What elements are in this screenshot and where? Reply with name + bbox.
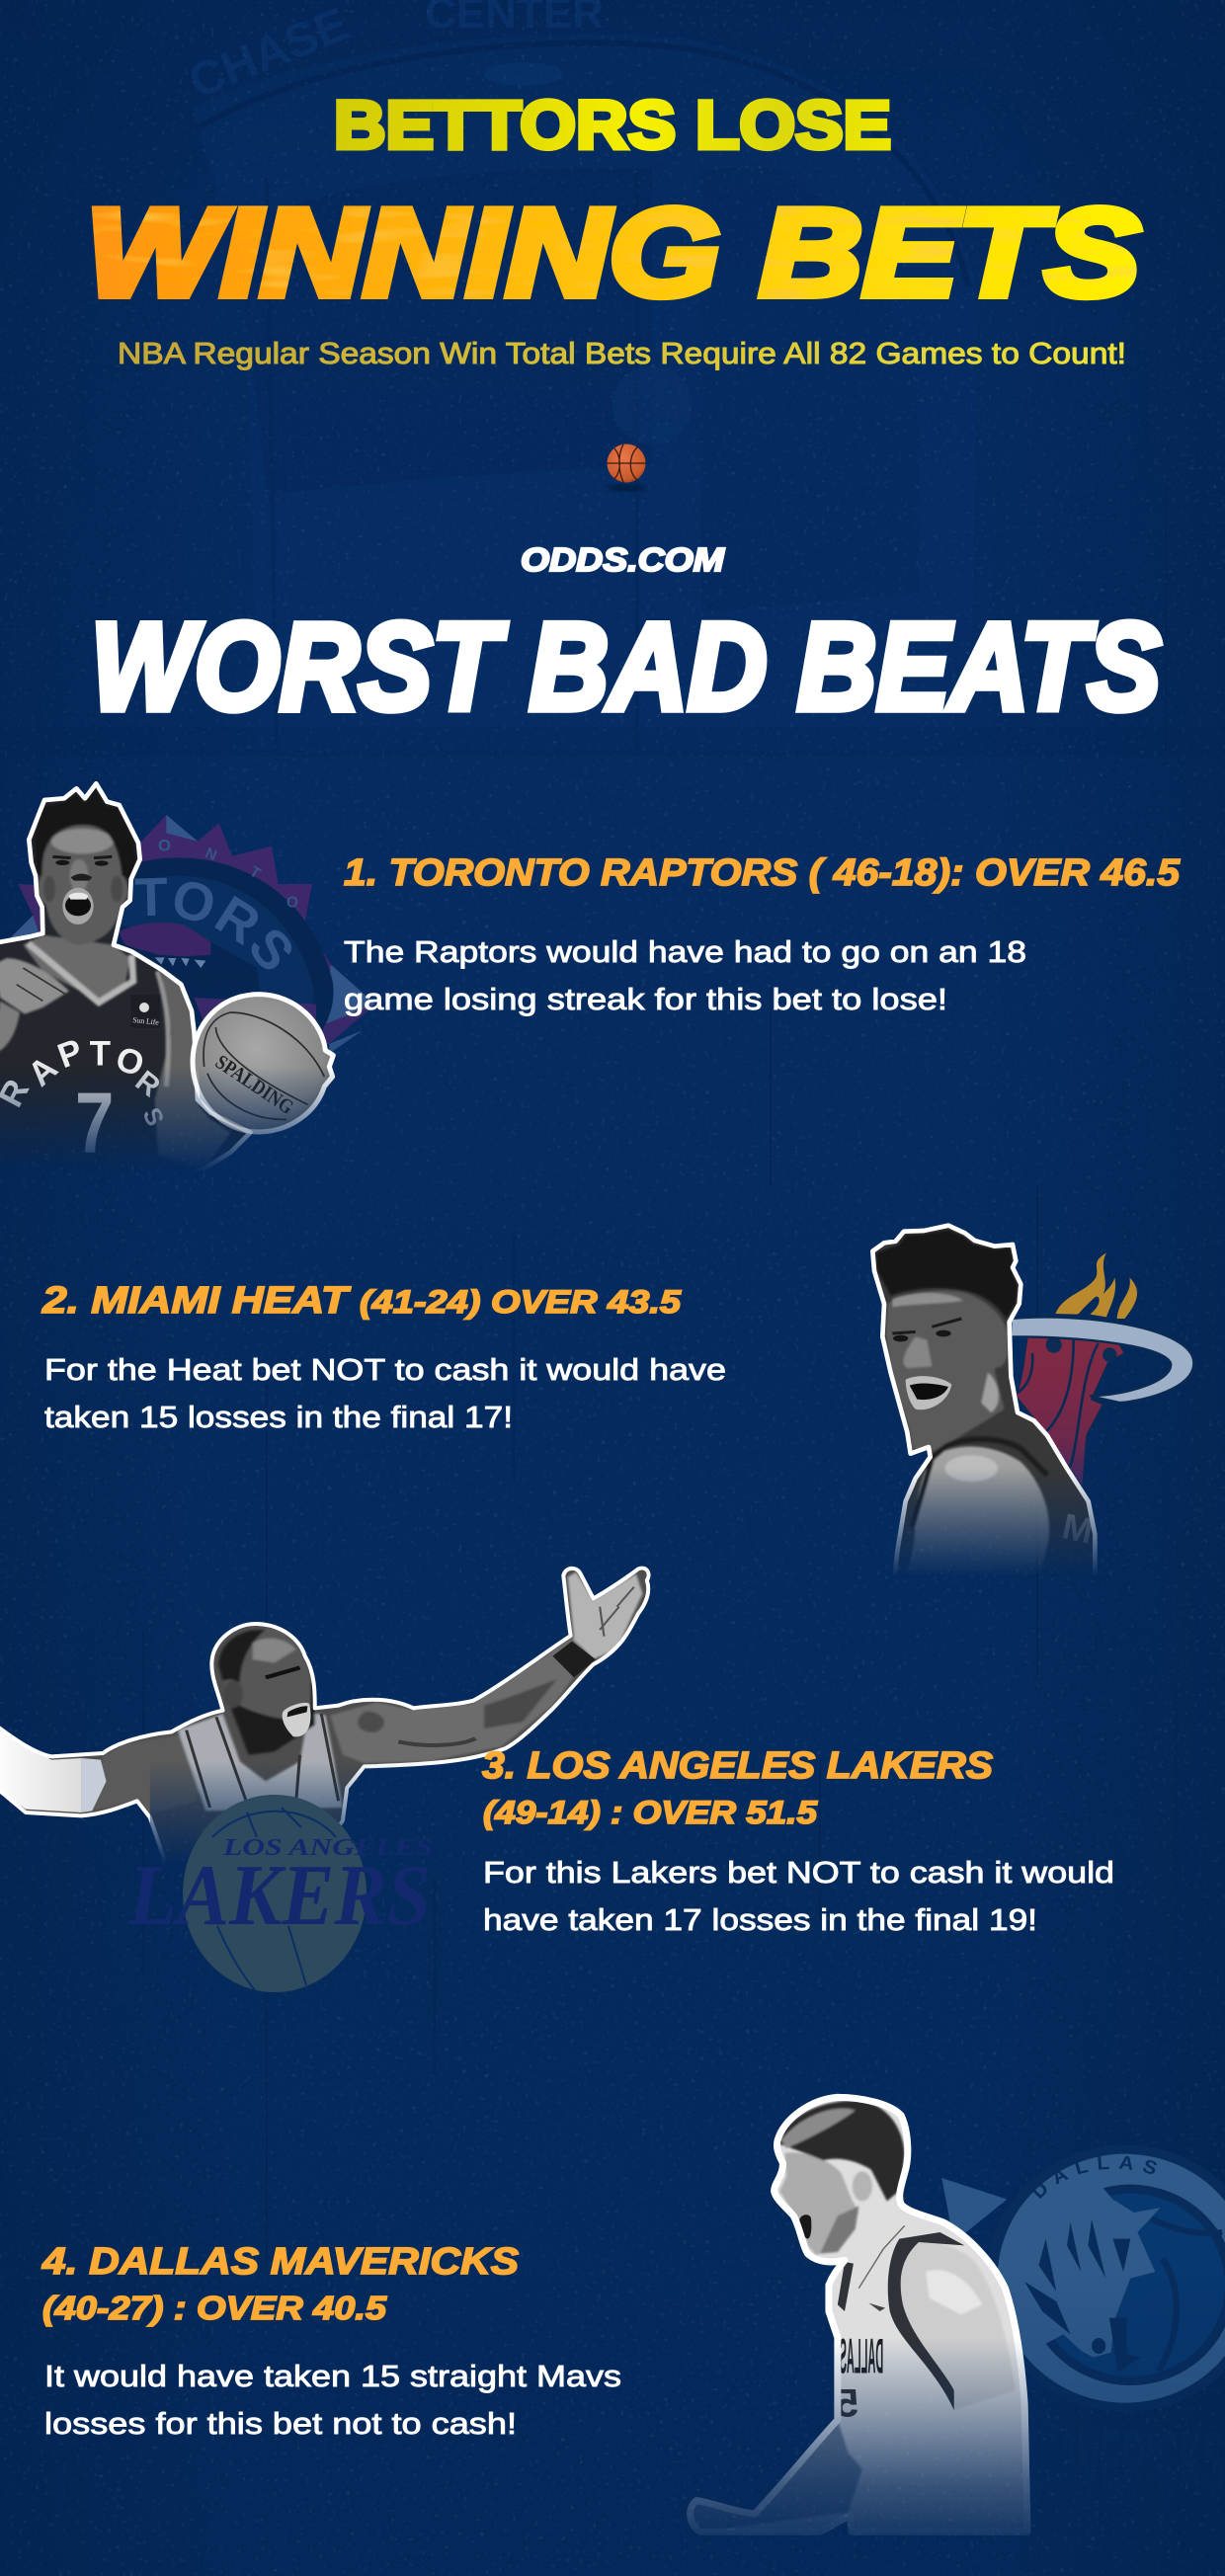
player: los angeles forward: [0, 1569, 649, 1880]
player: miami forward: [872, 1226, 1097, 1600]
panel 3: los angeles lakers: [0, 1569, 1114, 1992]
player: dallas guard: 5: [835, 2380, 858, 2425]
panel 4: dallas mavericks: [41, 2094, 1225, 2536]
basketball: spalding: [193, 995, 333, 1132]
text 3: have taken 17 losses in the final 19!: [483, 1902, 1037, 1937]
player: toronto guard: 7: [75, 1075, 114, 1171]
text 2: [44, 1352, 726, 1434]
heading 4: [41, 2241, 519, 2326]
player: toronto guard: A: [21, 1049, 65, 1094]
player: miami forward: M: [1059, 1505, 1097, 1552]
player: toronto guard: [0, 783, 250, 1185]
player: toronto guard: S: [137, 1103, 169, 1131]
logo: lakers: LAKERS: [127, 1848, 431, 1944]
heading 2: (41-24) OVER 43.5: [360, 1284, 682, 1320]
heading 3: (49-14) : OVER 51.5: [483, 1795, 818, 1830]
player: dallas guard: DALLAS: [840, 2328, 883, 2383]
player: toronto guard: P: [52, 1032, 88, 1076]
logo: heat: [1011, 1252, 1193, 1489]
player: toronto guard: R: [129, 1065, 166, 1103]
icon: basketball: [607, 444, 646, 492]
logo: lakers: LOS ANGELES: [222, 1835, 433, 1861]
player: toronto guard: Sun Life: [132, 1015, 160, 1027]
text 3: For this Lakers bet NOT to cash it would: [483, 1855, 1114, 1890]
background: ghost arena scoreboard: [0, 0, 1225, 757]
background: ghost arena scoreboard: CHASE: [182, 0, 356, 109]
heading 2: 2. MIAMI HEAT: [41, 1280, 351, 1322]
logo: raptors: O: [158, 837, 171, 855]
heading 1: 1. TORONTO RAPTORS ( 46-18): OVER 46.5: [344, 852, 1181, 894]
title: bettors lose: BETTORS LOSE: [334, 87, 891, 163]
text 1: The Raptors would have had to go on an 18: [344, 934, 1026, 969]
logo: raptors: O: [286, 894, 298, 911]
player: dallas guard: [690, 2097, 1027, 2532]
logo: raptors: N: [203, 845, 219, 864]
heading: odds.com: ODDS.COM: [521, 541, 726, 578]
text 4: It would have taken 15 straight Mavs: [44, 2359, 621, 2393]
text 2: taken 15 losses in the final 17!: [44, 1400, 513, 1434]
heading 4: (40-27) : OVER 40.5: [42, 2290, 387, 2326]
basketball: spalding: SPALDING: [211, 1051, 297, 1119]
logo: mavericks: [941, 2146, 1225, 2403]
title: winning bets: WINNING BETS: [86, 183, 1140, 322]
logo: raptors: TORS: [134, 877, 292, 970]
text 4: losses for this bet not to cash!: [44, 2406, 517, 2441]
logo: raptors: T: [247, 863, 264, 883]
text 1: game losing streak for this bet to lose!: [344, 982, 947, 1016]
subtitle: NBA Regular Season Win Total Bets Require All 82 Games to Count!: [118, 336, 1126, 370]
panel 1: toronto raptors: [0, 781, 1182, 1168]
heading 4: 4. DALLAS MAVERICKS: [41, 2241, 519, 2283]
text 3: [483, 1855, 1114, 1937]
player: toronto guard: O: [112, 1039, 148, 1085]
logo: raptors: [10, 815, 375, 1051]
logo: lakers: [127, 1795, 433, 1992]
text 4: [44, 2359, 621, 2441]
logo: mavericks: DALLAS: [1033, 2155, 1157, 2199]
text 2: For the Heat bet NOT to cash it would have: [44, 1352, 726, 1387]
heading 3: 3. LOS ANGELES LAKERS: [482, 1745, 993, 1787]
panel 2: miami heat: [41, 1226, 1193, 1600]
heading 3: [482, 1745, 993, 1830]
player: toronto guard: T: [90, 1034, 111, 1073]
heading 2: [41, 1280, 682, 1322]
text 1: [344, 934, 1026, 1016]
